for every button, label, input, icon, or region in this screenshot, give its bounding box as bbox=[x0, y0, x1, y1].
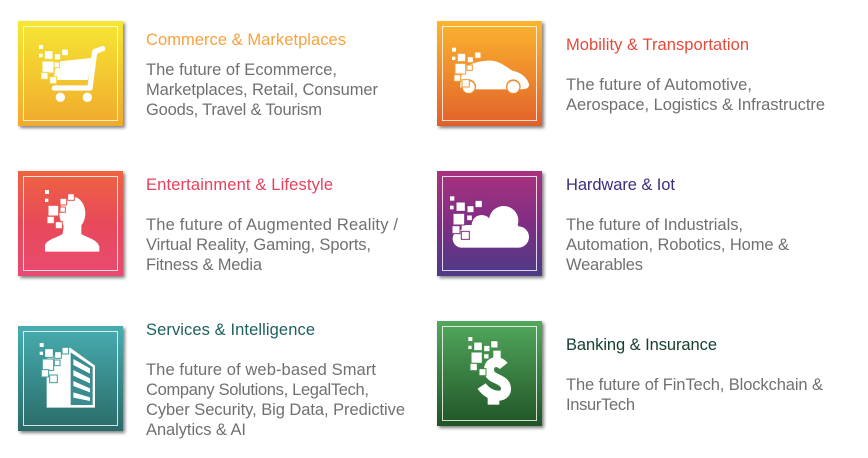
text block: entertainment description: The future of Augmented Reality / bbox=[146, 216, 398, 234]
panel: mobility and transportation bbox=[437, 21, 825, 126]
text block: mobility description: Aerospace, Logistics & Infrastructre bbox=[566, 96, 825, 114]
text block: hardware description bbox=[566, 216, 789, 274]
text block: services description: Company Solutions, LegalTech, bbox=[146, 381, 369, 399]
icon: car bbox=[437, 21, 542, 126]
heading: commerce and marketplaces: Commerce & Marketplaces bbox=[146, 31, 346, 49]
icon: person silhouette bbox=[18, 171, 123, 276]
text block: banking description: The future of FinTech, Blockchain & bbox=[566, 376, 823, 394]
text block: services description: Cyber Security, Big Data, Predictive bbox=[146, 401, 405, 419]
text block: services description: Analytics & AI bbox=[146, 421, 246, 439]
text block: commerce description: The future of Ecommerce, bbox=[146, 61, 337, 79]
text block: hardware description: The future of Industrials, bbox=[566, 216, 743, 234]
text block: mobility description bbox=[566, 76, 825, 114]
text block: commerce description: Marketplaces, Retail, Consumer bbox=[146, 81, 378, 99]
text block: hardware description: Wearables bbox=[566, 256, 643, 274]
icon: office building bbox=[18, 326, 123, 431]
text block: entertainment description bbox=[146, 216, 398, 274]
icon: cloud bbox=[437, 171, 542, 276]
text block: services description bbox=[146, 361, 405, 439]
text block: services description: The future of web-based Smart bbox=[146, 361, 376, 379]
text block: commerce description: Goods, Travel & Tourism bbox=[146, 101, 322, 119]
text block: entertainment description: Virtual Reality, Gaming, Sports, bbox=[146, 236, 371, 254]
icon: dollar sign bbox=[437, 321, 542, 426]
text block: mobility description: The future of Automotive, bbox=[566, 76, 752, 94]
text block: banking description bbox=[566, 376, 823, 414]
panel: banking and insurance bbox=[437, 321, 823, 426]
panel: hardware and iot bbox=[437, 171, 789, 276]
heading: entertainment and lifestyle: Entertainment & Lifestyle bbox=[146, 176, 333, 194]
heading: mobility and transportation: Mobility & Transportation bbox=[566, 36, 749, 54]
text block: banking description: InsurTech bbox=[566, 396, 635, 414]
text block: hardware description: Automation, Robotics, Home & bbox=[566, 236, 789, 254]
heading: banking and insurance: Banking & Insurance bbox=[566, 336, 717, 354]
text block: entertainment description: Fitness & Media bbox=[146, 256, 263, 274]
heading: hardware and iot: Hardware & Iot bbox=[566, 176, 675, 194]
text block: commerce description bbox=[146, 61, 378, 119]
icon: shopping cart bbox=[18, 21, 123, 126]
panel: services and intelligence bbox=[18, 321, 405, 439]
heading: services and intelligence: Services & Intelligence bbox=[146, 321, 315, 339]
panel: commerce and marketplaces bbox=[18, 21, 378, 126]
panel: entertainment and lifestyle bbox=[18, 171, 398, 276]
